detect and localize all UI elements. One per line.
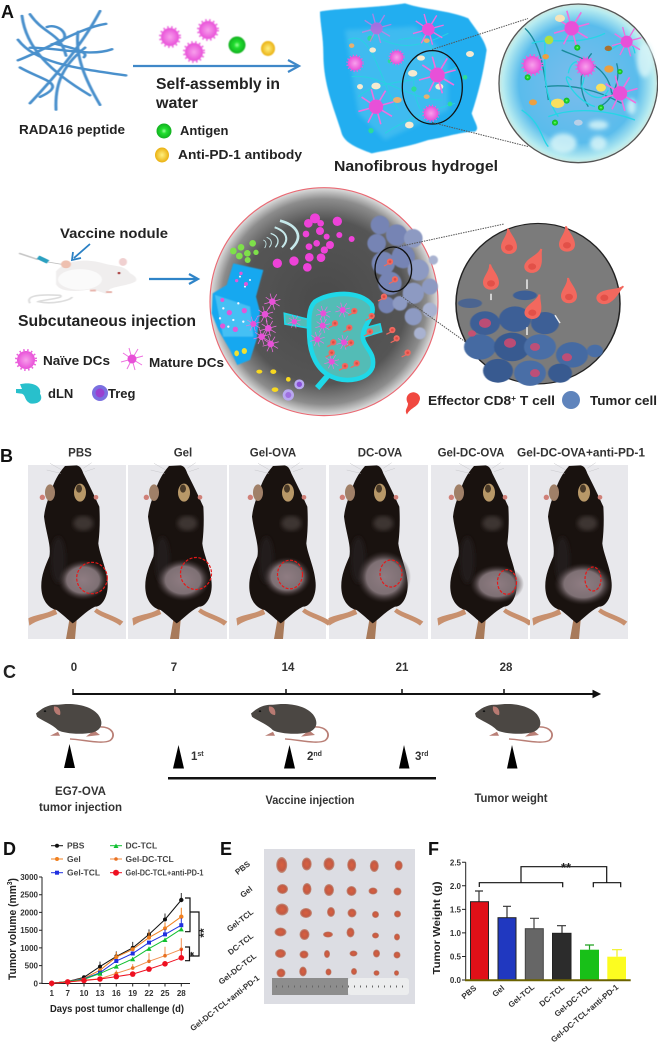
hydrogel contents: [219, 272, 251, 356]
legend: effector CD8 T cell: [406, 392, 555, 414]
label: vaccine injection: Vaccine injection: [266, 795, 354, 807]
antigen-loaded magenta dots: [273, 213, 355, 272]
text: self-assembly in water: Self-assembly in: [156, 76, 280, 93]
y tick labels: 500: [25, 962, 39, 971]
tumor mass: [367, 216, 438, 339]
y axis title: ): [7, 878, 19, 881]
y tick labels: 2500: [20, 891, 39, 900]
legend: Gel: [67, 854, 81, 864]
legend: dLN: dLN: [48, 386, 73, 401]
bar: Gel-DC-TCL+anti-PD-1: [607, 950, 626, 980]
legend: DC-TCL: [126, 840, 157, 850]
significance brackets: [185, 898, 199, 961]
panel letter A: A: [1, 2, 14, 22]
x tick labels: [49, 989, 186, 998]
y tick labels: 1.5: [450, 906, 462, 915]
panel letter C: C: [3, 662, 16, 682]
legend: antigen: [156, 123, 228, 138]
illustration: rat with syringe: [19, 253, 136, 303]
dose labels: [191, 751, 428, 763]
legend: PBS: [67, 840, 85, 850]
panel B: mouse photographs: [0, 446, 646, 639]
legend: Treg: Treg: [108, 386, 136, 401]
lymph node: [284, 294, 382, 390]
column titles: PBS: [68, 448, 92, 460]
text: self-assembly in water: [155, 76, 280, 112]
x tick labels: 22: [145, 989, 154, 998]
panel D: tumor volume line chart: [3, 839, 211, 1015]
tregs and antibodies: [256, 369, 304, 401]
legend: effector CD8 T cell: Effector CD8: [428, 393, 507, 408]
day labels: 7: [171, 662, 177, 674]
label: tumor injection: EG7-OVA: [55, 786, 106, 798]
annotation: vaccine nodule: [60, 225, 168, 260]
tumor photo: [264, 849, 415, 1004]
axes: [39, 877, 190, 986]
y tick labels: 2.0: [450, 882, 462, 891]
significance stars: *: [187, 951, 201, 956]
series: Gel-TCL: [52, 918, 183, 983]
x axis baseline: [465, 979, 631, 981]
panel C: timeline: [3, 662, 600, 814]
label: tumor injection: tumor injection: [39, 802, 122, 814]
bar: PBS: [470, 891, 488, 980]
panel letter E: E: [220, 839, 232, 859]
legend: Gel-DC-TCL+anti-PD-1: [126, 868, 204, 878]
effector T cells migrating: [366, 258, 411, 357]
illustration: immune response circle: [210, 188, 438, 416]
panel letter F: F: [428, 839, 439, 859]
photo Gel-OVA: [229, 463, 331, 639]
series: PBS: [52, 893, 184, 983]
label: subcutaneous injection: Subcutaneous injection: [18, 313, 196, 330]
legend: naive DCs: [16, 350, 110, 370]
panel letter D: D: [3, 839, 16, 859]
arrowheads: [64, 744, 518, 768]
y tick labels: 1000: [20, 944, 39, 953]
x labels: Gel: [491, 984, 506, 999]
significance stars: **: [197, 928, 211, 938]
dose labels: 3: [415, 751, 421, 763]
row labels: [189, 859, 262, 1033]
day labels: 14: [282, 662, 295, 674]
significance brackets: [479, 867, 621, 887]
x labels: Gel-DC-TCL+anti-PD-1: [549, 982, 621, 1044]
significance stars: **: [561, 860, 572, 875]
x labels: [460, 982, 621, 1044]
vaccine bar: [168, 777, 436, 780]
panel F: tumor weight bar chart: [428, 839, 631, 1044]
icon: naive DCs and particles: [160, 20, 275, 62]
legend: anti-PD-1 antibody: Anti-PD-1 antibody: [178, 147, 303, 162]
column titles: DC-OVA: [358, 448, 402, 460]
panel E: excised tumors photo: [189, 839, 415, 1033]
y tick labels: 0.0: [450, 976, 462, 985]
y axis title: Tumor Weight (g): [431, 882, 443, 974]
x tick labels: 10: [80, 989, 89, 998]
hydrogel fragment: [212, 263, 263, 365]
dose labels: rd: [421, 751, 428, 758]
bar: Gel-DC-TCL: [580, 945, 599, 980]
legend: effector CD8 T cell: +: [511, 394, 516, 403]
column titles: Gel: [174, 448, 192, 460]
x tick labels: 19: [128, 989, 138, 998]
antigen dots and wave: [230, 221, 298, 263]
legend: naive DCs: Naïve DCs: [43, 353, 110, 368]
x tick labels: 7: [65, 989, 70, 998]
photo PBS: [28, 463, 126, 639]
bar: DC-TCL: [552, 926, 571, 980]
y tick labels: 3000: [20, 873, 39, 882]
y tick labels: 2.5: [450, 858, 462, 868]
row labels: Gel: [239, 884, 254, 900]
mouse day 28: [475, 704, 552, 742]
legend: Gel-TCL: [67, 868, 100, 878]
x labels: Gel-DC-TCL: [553, 983, 593, 1019]
arrow: self-assembly: [133, 60, 299, 72]
row labels: Gel-TCL: [225, 907, 255, 934]
x axis title: Days post tumor challenge (d): [50, 1003, 184, 1015]
bar: Gel-TCL: [525, 918, 543, 980]
day labels: 0: [71, 662, 77, 674]
annotation: vaccine nodule: Vaccine nodule: [60, 225, 168, 241]
timeline arrow: [73, 689, 600, 698]
callout lines to tumor enlargement: [397, 224, 504, 348]
column titles: [68, 448, 646, 460]
day labels: 28: [500, 662, 513, 674]
dose labels: 1: [191, 751, 197, 763]
x labels: DC-TCL: [538, 983, 566, 1009]
callout ring on cube: [402, 51, 462, 124]
mouse day 0: [36, 704, 113, 742]
x tick labels: 1: [49, 989, 54, 998]
y tick labels: [450, 858, 462, 985]
callout lines to enlargement: [432, 18, 528, 146]
legend: dLN: [16, 383, 73, 404]
illustration: hydrogel enlargement: [499, 4, 658, 163]
y axis title: Tumor volume (mm: [7, 879, 19, 980]
y tick labels: 1.0: [450, 929, 462, 938]
day labels: 21: [396, 662, 409, 674]
photo Gel-DC-OVA: [431, 463, 532, 639]
row labels: Gel-DC-TCL: [217, 951, 258, 986]
photo Gel-DC-OVA+anti-PD-1: [530, 463, 628, 639]
panel A: hydrogel formation: [1, 2, 658, 416]
legend: antigen: Antigen: [180, 123, 228, 138]
legend: tumor cell: Tumor cell: [590, 393, 657, 408]
series: DC-TCL: [52, 927, 184, 983]
x tick labels: 16: [112, 989, 121, 998]
day labels: [71, 662, 513, 674]
icon: RADA16 peptide fibers: [18, 11, 126, 110]
column titles: Gel-OVA: [250, 448, 296, 460]
panel letter B: B: [0, 446, 13, 466]
legend: effector CD8 T cell: T cell: [516, 393, 555, 408]
column titles: Gel-DC-OVA: [438, 448, 504, 460]
column titles: Gel-DC-OVA+anti-PD-1: [517, 448, 646, 460]
mature DCs cluster: [246, 294, 280, 352]
mouse day 14: [251, 704, 328, 742]
x tick labels: 28: [177, 989, 186, 998]
dose labels: st: [197, 751, 204, 758]
label: RADA16 peptide: RADA16 peptide: [19, 123, 125, 137]
label: tumor weight: Tumor weight: [474, 793, 548, 805]
legend: Gel-DC-TCL: [126, 854, 174, 864]
legend: [51, 840, 204, 878]
row labels: Gel-DC-TCL+anti-PD-1: [189, 973, 262, 1033]
x tick labels: 25: [161, 989, 170, 998]
series: Gel: [52, 908, 184, 983]
bar: Gel: [498, 906, 516, 980]
series: Gel-DC-TCL: [52, 938, 183, 983]
dose labels: nd: [313, 751, 322, 758]
x tick labels: 13: [96, 989, 105, 998]
photo DC-OVA: [328, 463, 428, 639]
y tick labels: 0.5: [450, 953, 462, 962]
legend: mature DCs: Mature DCs: [149, 355, 224, 370]
y tick labels: 1500: [20, 926, 39, 935]
row labels: PBS: [233, 859, 252, 877]
illustration: hydrogel cube: [320, 3, 487, 153]
text: self-assembly in water: water: [155, 95, 198, 112]
arrow: injection to immune response: [149, 274, 198, 284]
y axis title: 3: [7, 881, 14, 885]
y tick labels: 0: [34, 979, 39, 988]
x labels: Gel-TCL: [507, 983, 536, 1010]
legend: tumor cell: [562, 391, 657, 409]
significance stars: [187, 928, 211, 956]
legend: Treg: [92, 385, 136, 401]
illustration: T cells attacking tumor: [456, 223, 629, 386]
y tick labels: [20, 873, 39, 988]
series: Gel-DC-TCL+anti-PD-1: [49, 949, 184, 986]
x labels: PBS: [460, 983, 479, 1001]
callout ring on tumor: [375, 247, 412, 292]
legend: mature DCs: [121, 348, 224, 370]
label: nanofibrous hydrogel: Nanofibrous hydrogel: [334, 158, 498, 175]
y tick labels: 2000: [20, 908, 39, 917]
label: tumor injection: [39, 786, 122, 814]
y axis: [462, 862, 466, 980]
row labels: DC-TCL: [226, 931, 255, 957]
photo Gel: [128, 463, 227, 639]
dose labels: 2: [307, 751, 313, 763]
